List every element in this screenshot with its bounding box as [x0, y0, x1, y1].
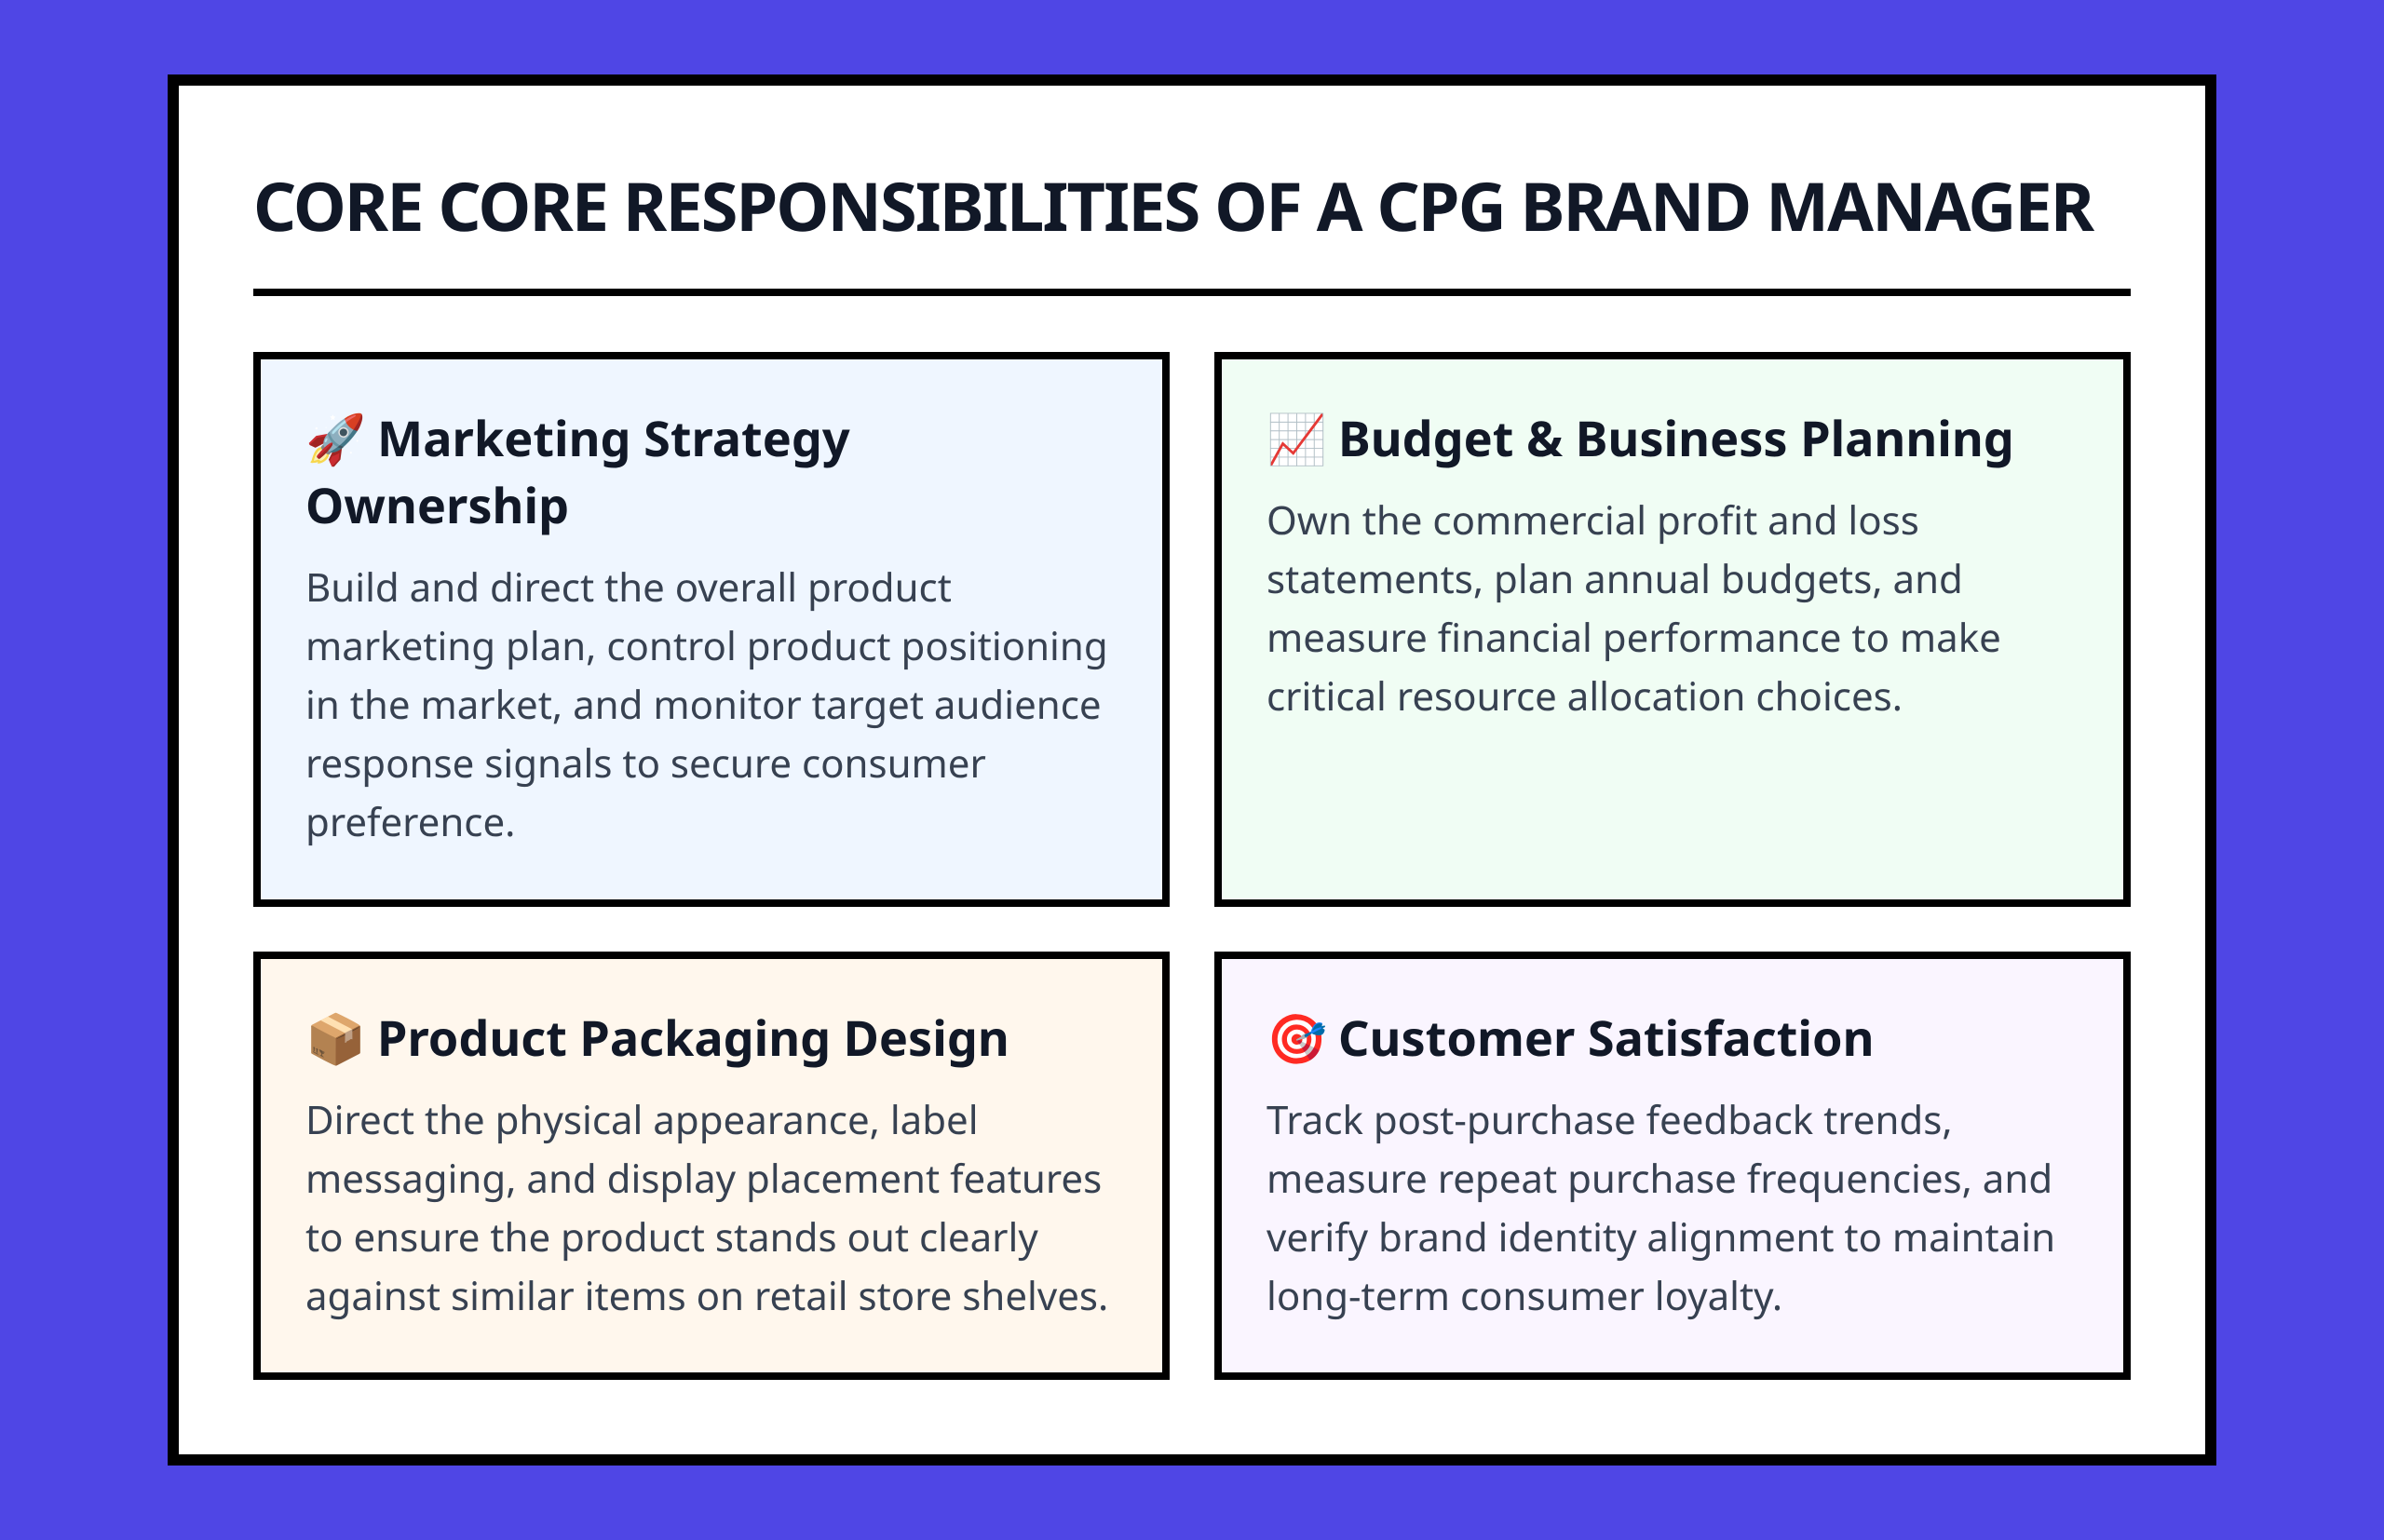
text: marketing strategy description: [305, 561, 1108, 848]
heading: product packaging design with package icon: 📦 Product Packaging Design: [305, 1005, 1009, 1071]
text: budget description: [1266, 493, 2001, 723]
panel: customer satisfaction: [1214, 952, 2131, 1380]
text: marketing strategy description: in the market, and monitor target audience: [305, 678, 1102, 731]
heading: marketing strategy ownership with rocket icon: 🚀 Marketing Strategy: [305, 405, 850, 471]
heading: marketing strategy ownership with rocket icon: Ownership: [305, 472, 569, 538]
text: customer satisfaction description: [1266, 1093, 2055, 1322]
text: marketing strategy description: preference.: [305, 795, 515, 848]
text: packaging description: against similar items on retail store shelves.: [305, 1269, 1108, 1322]
text: packaging description: messaging, and display placement features: [305, 1152, 1102, 1205]
title divider: [253, 289, 2131, 296]
text: marketing strategy description: response signals to secure consumer: [305, 736, 986, 790]
heading: budget and business planning with chart icon: 📈 Budget & Business Planning: [1266, 405, 2014, 471]
text: budget description: statements, plan annual budgets, and: [1266, 552, 1963, 605]
text: marketing strategy description: marketing plan, control product positioning: [305, 619, 1108, 672]
panel: product packaging design: [253, 952, 1170, 1380]
panel: marketing strategy ownership: [253, 352, 1170, 907]
heading: marketing strategy ownership with rocket icon: [305, 405, 850, 538]
title: CORE CORE RESPONSIBILITIES OF A CPG BRAND MANAGER: [253, 160, 2093, 251]
text: customer satisfaction description: Track post-purchase feedback trends,: [1266, 1093, 1953, 1146]
text: packaging description: [305, 1093, 1108, 1322]
text: packaging description: to ensure the product stands out clearly: [305, 1210, 1038, 1263]
text: customer satisfaction description: long-term consumer loyalty.: [1266, 1269, 1782, 1322]
main white panel: [168, 74, 2216, 1466]
text: marketing strategy description: Build and direct the overall product: [305, 561, 952, 614]
heading: customer satisfaction with target icon: 🎯 Customer Satisfaction: [1266, 1005, 1875, 1071]
text: budget description: critical resource allocation choices.: [1266, 669, 1903, 723]
text: customer satisfaction description: measure repeat purchase frequencies, and: [1266, 1152, 2052, 1205]
text: customer satisfaction description: verify brand identity alignment to maintain: [1266, 1210, 2055, 1263]
text: budget description: Own the commercial profit and loss: [1266, 493, 1919, 547]
text: budget description: measure financial performance to make: [1266, 611, 2001, 664]
text: packaging description: Direct the physical appearance, label: [305, 1093, 979, 1146]
panel: budget and business planning: [1214, 352, 2131, 907]
